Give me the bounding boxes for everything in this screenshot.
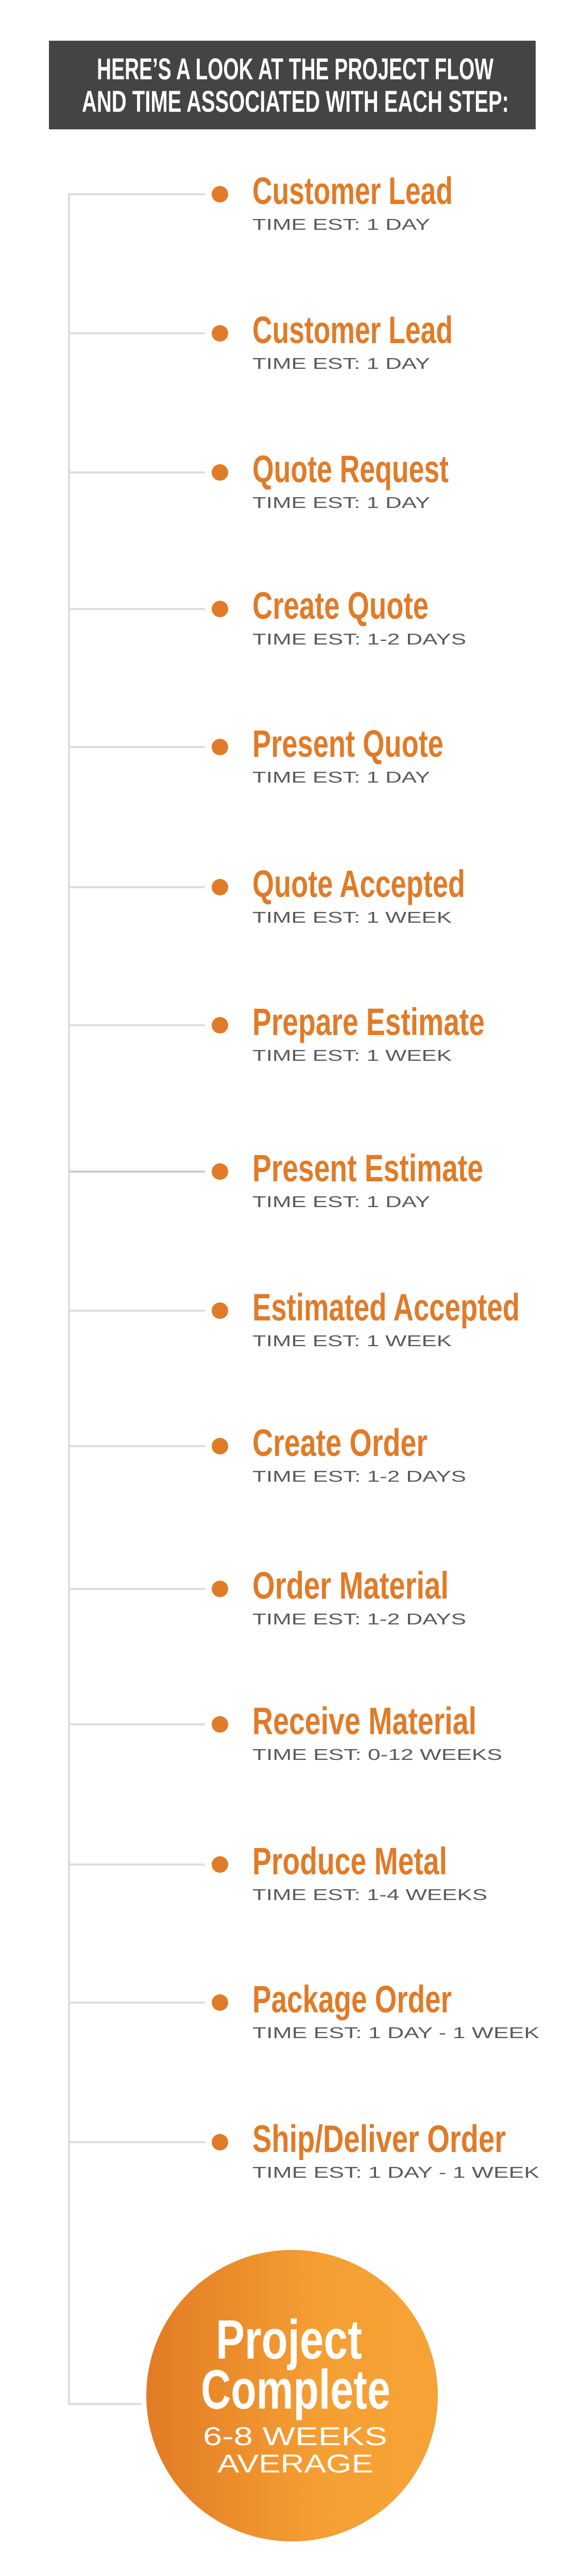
step 1: Customer Lead: Customer Lead [252, 170, 453, 212]
step 15: Ship/Deliver Order: TIME EST: 1 DAY - 1 WEEK [252, 2163, 539, 2181]
step 4: Create Quote: Create Quote [252, 584, 429, 627]
step 13: Produce Metal [69, 1840, 487, 1904]
step 12: Receive Material: TIME EST: 0-12 WEEKS [252, 1745, 502, 1764]
step 4: Create Quote: TIME EST: 1-2 DAYS [252, 630, 466, 648]
step 15: Ship/Deliver Order [69, 2117, 539, 2181]
step 13: Produce Metal: Produce Metal [252, 1840, 447, 1883]
step 15: Ship/Deliver Order: Ship/Deliver Order [252, 2117, 506, 2160]
step 7: Prepare Estimate: TIME EST: 1 WEEK [252, 1046, 452, 1064]
step 13: Produce Metal: TIME EST: 1-4 WEEKS [252, 1886, 487, 1904]
step 3: Quote Request [69, 448, 449, 512]
step 9: Estimated Accepted [69, 1286, 520, 1350]
step 1: Customer Lead [69, 170, 453, 233]
step 6: Quote Accepted [69, 862, 465, 926]
step 10: Create Order: Create Order [252, 1421, 428, 1464]
step 9: Estimated Accepted: TIME EST: 1 WEEK [252, 1332, 452, 1350]
step 10: Create Order: TIME EST: 1-2 DAYS [252, 1467, 466, 1485]
completion circle: 6-8 WEEKS [203, 2422, 387, 2451]
step 5: Present Quote: TIME EST: 1 DAY [252, 768, 430, 786]
step 14: Package Order: Package Order [252, 1978, 452, 2021]
step 7: Prepare Estimate: Prepare Estimate [252, 1001, 485, 1043]
step 11: Order Material: TIME EST: 1-2 DAYS [252, 1610, 466, 1628]
step 5: Present Quote [69, 722, 443, 786]
step 7: Prepare Estimate [69, 1001, 485, 1064]
completion circle: Complete [201, 2358, 390, 2420]
step 8: Present Estimate: TIME EST: 1 DAY [252, 1193, 430, 1211]
step 3: Quote Request: Quote Request [252, 448, 449, 490]
step 12: Receive Material: Receive Material [252, 1700, 476, 1742]
step 12: Receive Material [69, 1700, 502, 1764]
step 14: Package Order [69, 1978, 539, 2042]
title banner [49, 41, 536, 129]
completion circle [146, 2250, 438, 2541]
step 3: Quote Request: TIME EST: 1 DAY [252, 494, 430, 512]
step 8: Present Estimate: Present Estimate [252, 1147, 483, 1190]
completion circle: AVERAGE [217, 2449, 373, 2478]
step 6: Quote Accepted: Quote Accepted [252, 862, 465, 905]
step 10: Create Order [69, 1421, 466, 1485]
step 8: Present Estimate [69, 1147, 483, 1211]
step 5: Present Quote: Present Quote [252, 722, 443, 765]
step 4: Create Quote [69, 584, 466, 648]
step 6: Quote Accepted: TIME EST: 1 WEEK [252, 908, 452, 926]
step 14: Package Order: TIME EST: 1 DAY - 1 WEEK [252, 2024, 539, 2042]
step 1: Customer Lead: TIME EST: 1 DAY [252, 215, 430, 233]
step 11: Order Material [69, 1564, 466, 1628]
completion circle: Project [216, 2308, 362, 2370]
step 11: Order Material: Order Material [252, 1564, 449, 1607]
timeline spine [68, 193, 142, 2405]
step 2: Customer Lead [69, 309, 453, 372]
step 2: Customer Lead: TIME EST: 1 DAY [252, 354, 430, 372]
step 2: Customer Lead: Customer Lead [252, 309, 453, 351]
